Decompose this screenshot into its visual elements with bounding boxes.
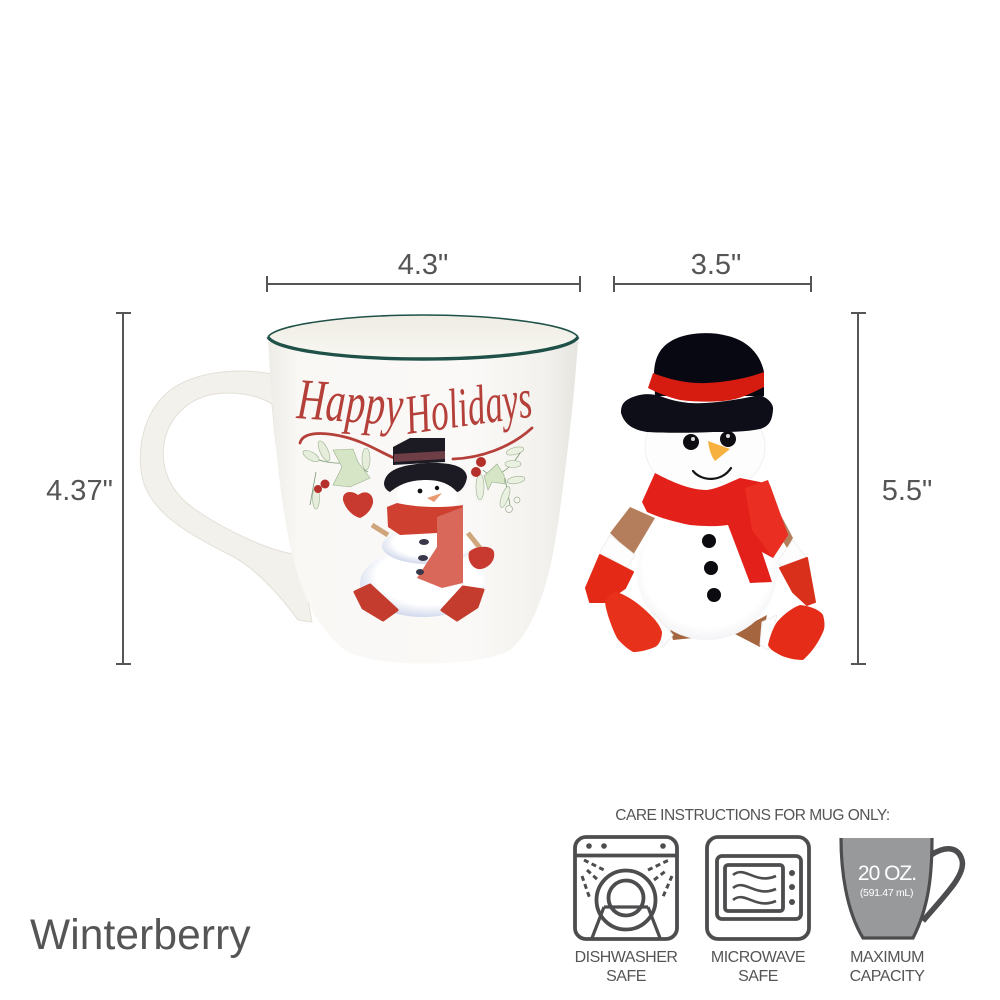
dimension: plush height 5.5 in: 5.5" [882,475,932,507]
label: dishwasher safe: SAFE [606,968,646,985]
label: microwave safe: MICROWAVE [711,949,805,966]
label: maximum capacity: MAXIMUM [850,949,924,966]
label: dishwasher safe: DISHWASHER [575,949,677,966]
illustrated hat [393,438,445,465]
plush buttons [702,534,721,602]
dimension: mug width 4.3 in: 4.3" [398,249,448,281]
dimension: mug height 4.37 in: 4.37" [46,475,113,507]
mug lettering: Happy Holidays: Holidays [401,368,536,447]
holly right [471,445,525,512]
illustrated buttons [416,539,429,575]
illustrated boots [355,585,397,620]
dimension: plush width 3.5 in: 3.5" [691,249,741,281]
title: Winterberry: Winterberry [30,912,251,959]
plush feet [605,592,824,660]
icon: microwave [707,837,809,939]
mug lettering: Happy Holidays [294,366,536,447]
illustrated face [418,486,442,502]
illustrated arms [372,525,480,548]
icon: capacity mug 20 oz [841,838,962,938]
label: microwave safe: SAFE [738,968,778,985]
plush hat red band [648,372,764,402]
plush right arm [770,508,793,548]
illustrated scarf [387,503,463,535]
dimension: plush height 5.5 in [851,313,932,664]
heading: care instructions: CARE INSTRUCTIONS FOR MUG ONLY: [615,807,890,824]
mug green rim [268,315,578,359]
plush left arm [610,507,655,555]
plush face [683,431,736,479]
icon: dishwasher [575,837,677,939]
holly left [301,439,370,509]
illustrated snowman body [360,549,486,617]
plush scarf [642,473,788,583]
mug lettering swash [300,428,532,459]
icon: capacity mug 20 oz: (591.47 mL) [860,887,913,899]
mug interior [269,315,577,359]
plush legs [667,615,767,647]
dimension: plush width 3.5 in [614,249,811,292]
label: maximum capacity: CAPACITY [850,968,925,985]
mug snowman illustration [343,438,494,620]
plush hat [621,333,773,433]
plush head [645,399,765,495]
illustrated mittens [343,492,373,518]
mug body [268,342,578,664]
dimension: mug height 4.37 in [46,313,131,664]
icon: capacity mug 20 oz: 20 OZ. [858,862,916,885]
dimension: mug width 4.3 in [267,249,580,292]
mug handle [140,371,312,622]
mug lettering: Happy Holidays: Happy [294,366,406,438]
plush snowman [586,333,824,660]
plush body [637,504,777,640]
mug [140,315,578,664]
